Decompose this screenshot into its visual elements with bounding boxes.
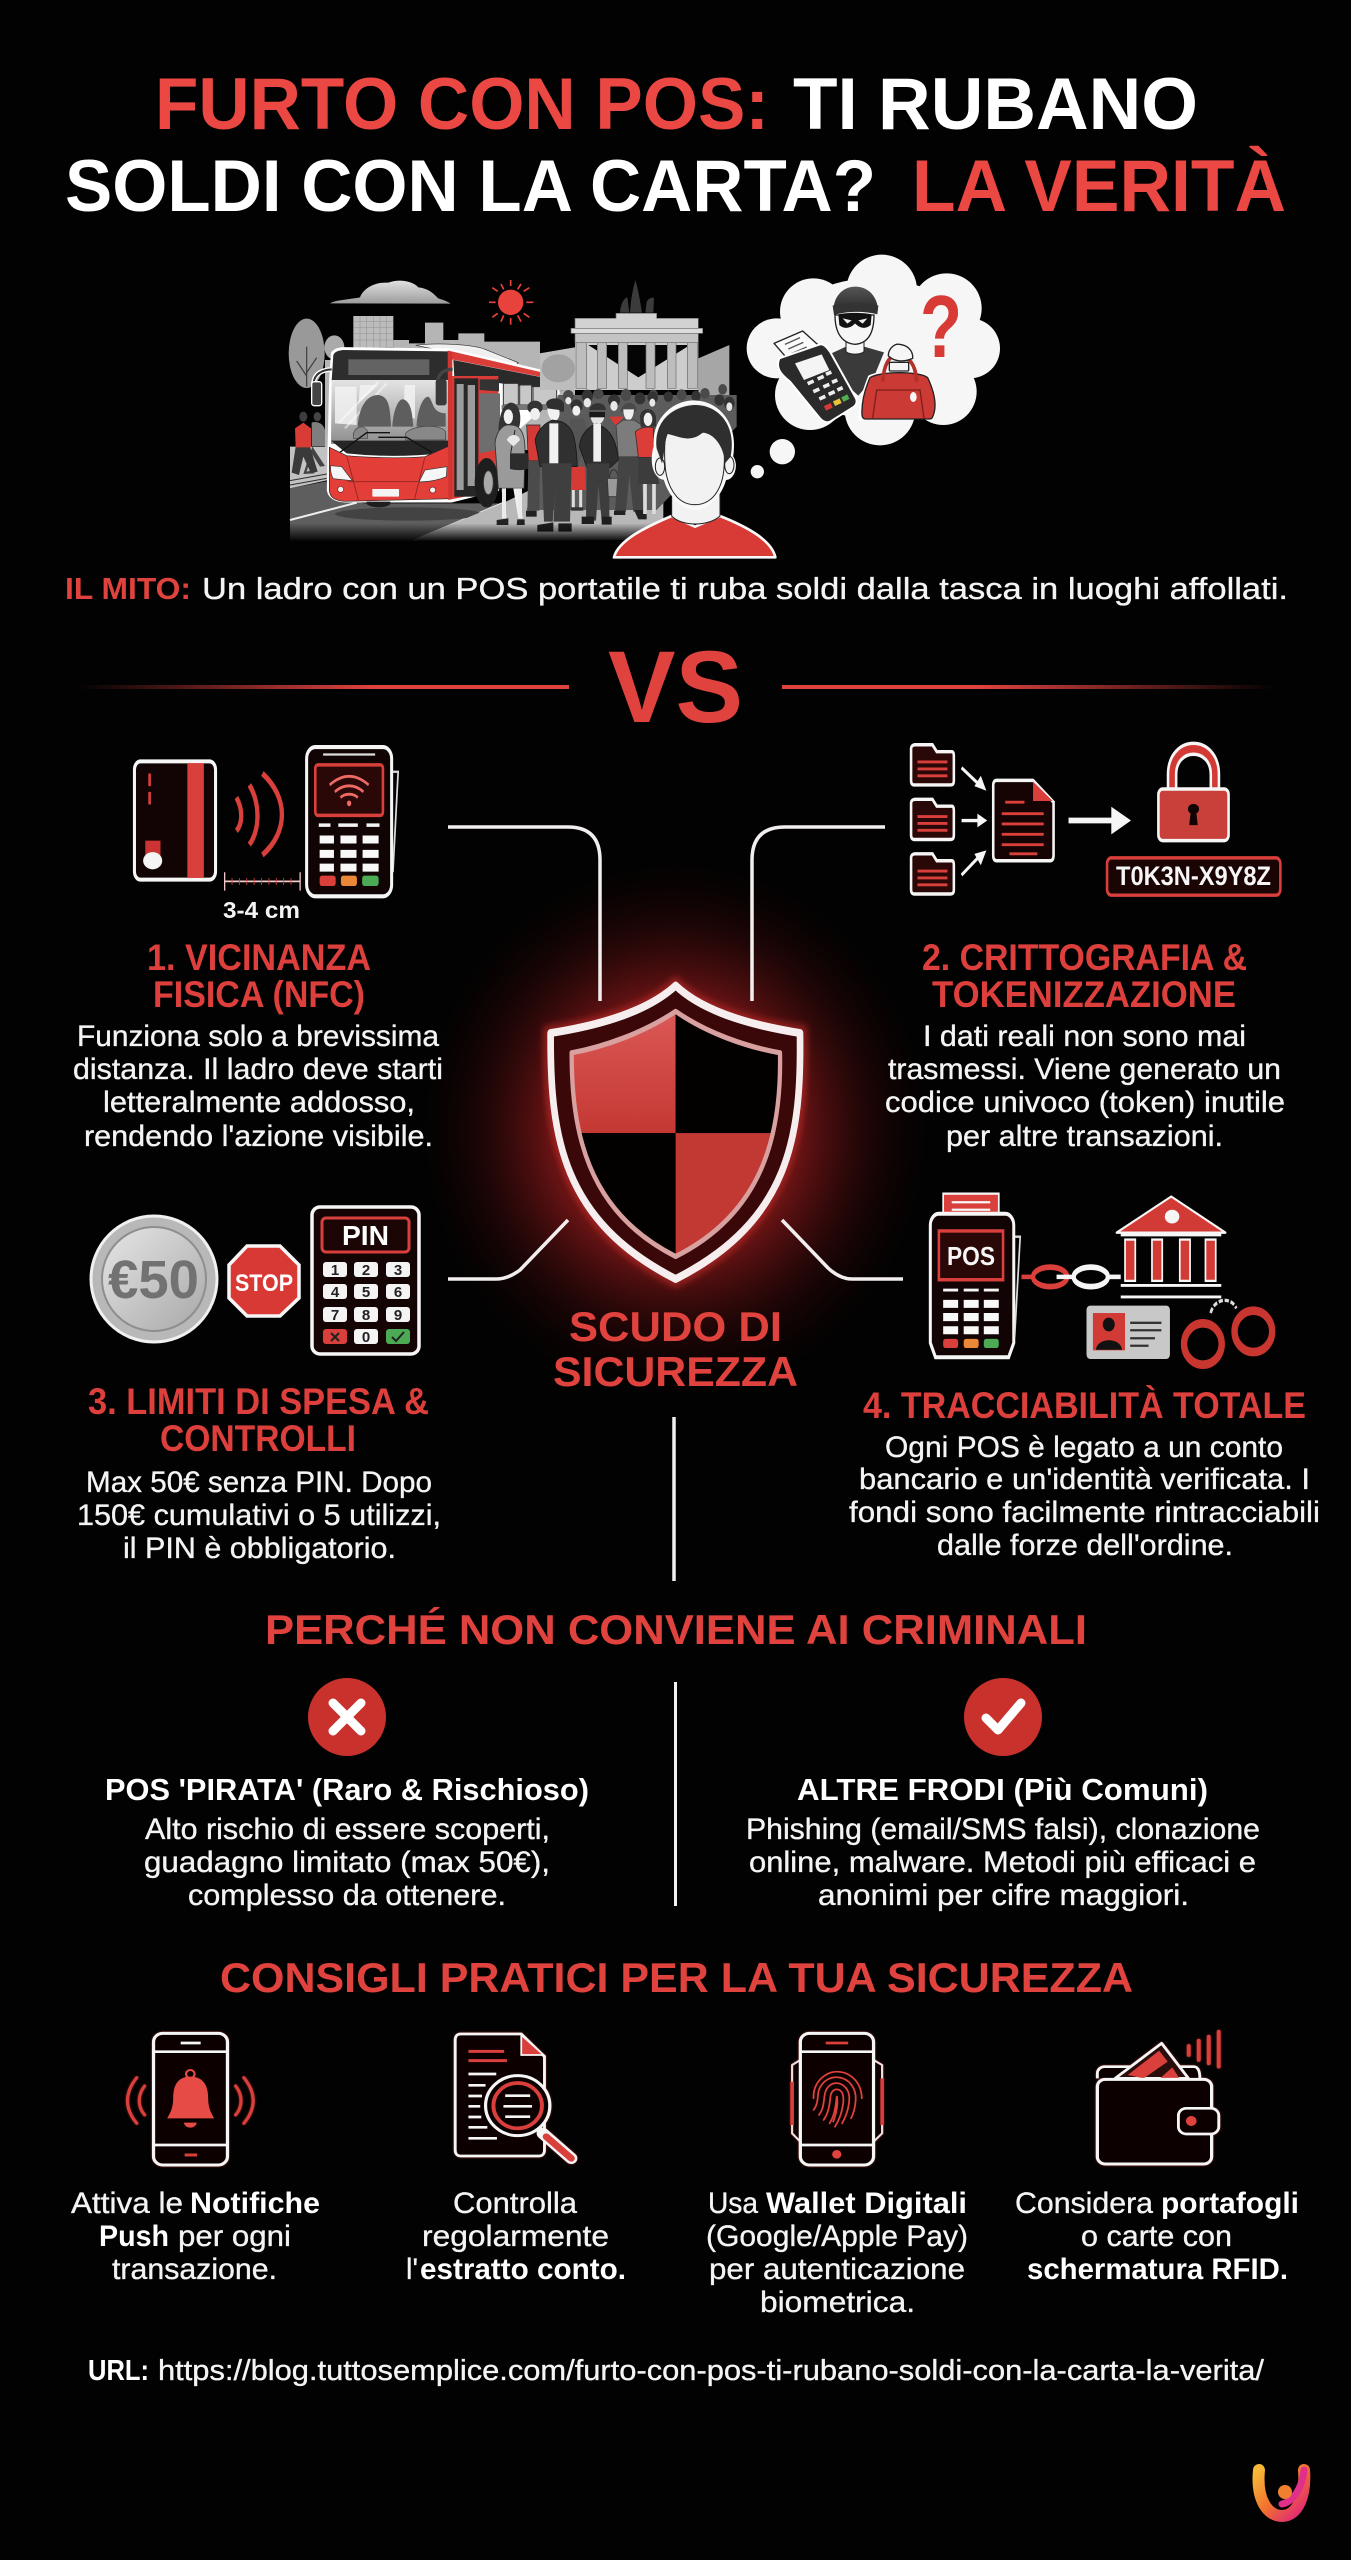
ground (413, 490, 663, 540)
title: TI RUBANO (793, 64, 1198, 145)
crowd (495, 384, 737, 532)
handbag (858, 344, 937, 420)
PIN pad: 4 (331, 1284, 340, 1301)
token code: T0K3N-X9Y8Z (1116, 861, 1271, 891)
thinking man (614, 402, 775, 557)
body text: Phishing (email/SMS falsi), clonazione (746, 1813, 1260, 1846)
tip: RFID shielding (1015, 2032, 1299, 2286)
caption: Controlla (453, 2187, 577, 2220)
woman red shirt (635, 409, 659, 514)
bus (312, 344, 559, 507)
icon: card and POS terminal (134, 747, 398, 896)
road (290, 447, 585, 541)
VS divider: VS (608, 630, 743, 744)
body text: 150€ cumulativi o 5 utilizzi, (77, 1499, 441, 1532)
icon: phone with bell (127, 2033, 253, 2165)
caption: per ogni (178, 2220, 291, 2253)
PIN pad (312, 1207, 419, 1354)
body text: Funziona solo a brevissima (77, 1020, 439, 1053)
panel: pirate POS (105, 1678, 589, 1912)
subheading: POS 'PIRATA' (Raro & Rischioso) (105, 1772, 589, 1807)
body text: Ogni POS è legato a un conto (885, 1431, 1283, 1464)
heading: why criminals avoid it: PERCHÉ NON CONVIENE AI CRIMINALI (265, 1606, 1087, 1653)
cloud (330, 281, 451, 304)
icon: cross (308, 1678, 386, 1756)
PIN pad: 6 (394, 1284, 402, 1301)
caption: biometrica. (760, 2286, 915, 2319)
background trees (540, 345, 729, 395)
man gray shirt (614, 403, 647, 519)
caption: Attiva le (71, 2187, 183, 2220)
PIN pad: 7 (331, 1307, 339, 1324)
body text: trasmessi. Viene generato un (888, 1053, 1281, 1086)
body text: dalle forze dell'ordine. (937, 1529, 1233, 1562)
shield label: SCUDO DI (569, 1303, 782, 1350)
red shirt person (526, 401, 543, 517)
bus scene (289, 280, 585, 541)
body text: Alto rischio di essere scoperti, (145, 1813, 550, 1846)
body text: anonimi per cifre maggiori. (818, 1879, 1189, 1912)
body text: codice univoco (token) inutile (885, 1086, 1285, 1119)
title (65, 64, 1286, 227)
body text: letteralmente addosso, (103, 1086, 415, 1119)
panel: spending limits (77, 1207, 441, 1565)
body text (885, 1020, 1285, 1153)
POS label: POS (947, 1241, 995, 1271)
caption: Push (99, 2220, 169, 2253)
gate, crowd and man (280, 280, 775, 557)
heading: 4. TRACCIABILITÀ TOTALE (863, 1385, 1306, 1426)
shield glow (420, 860, 930, 1400)
body text: online, malware. Metodi più efficaci e (749, 1846, 1256, 1879)
body text (77, 1466, 441, 1565)
caption: per autenticazione (709, 2253, 965, 2286)
PIN pad: 2 (362, 1262, 370, 1279)
man in jacket (535, 398, 577, 532)
PIN pad: 3 (394, 1262, 402, 1279)
title: FURTO CON POS: (155, 64, 769, 145)
heading (147, 937, 371, 1015)
portable POS (774, 331, 857, 422)
fade at bottom (280, 523, 700, 542)
PIN pad: 9 (394, 1307, 402, 1324)
body text (144, 1813, 550, 1912)
security shield (547, 982, 803, 1283)
stop sign (229, 1246, 299, 1316)
red top behind (609, 417, 623, 427)
heading: CONTROLLI (160, 1418, 356, 1459)
caption (1015, 2187, 1299, 2286)
caption: Usa (708, 2187, 758, 2220)
heading: FISICA (NFC) (153, 974, 365, 1015)
thief (829, 287, 884, 396)
panel: traceability (849, 1194, 1320, 1562)
caption: estratto conto. (420, 2253, 626, 2286)
caption (71, 2187, 320, 2286)
icon: POS chained to bank, ID card and handcuffs (930, 1194, 1272, 1365)
heading (88, 1381, 429, 1459)
icon: document and magnifier (455, 2034, 571, 2158)
caption: schermatura RFID. (1027, 2253, 1288, 2286)
tip: push notifications (71, 2033, 320, 2286)
body text: Max 50€ senza PIN. Dopo (86, 1466, 432, 1499)
coin: €50 (108, 1250, 199, 1310)
heading (922, 937, 1247, 1015)
logo (1259, 2470, 1304, 2516)
caption: portafogli (1161, 2187, 1299, 2220)
caption: o carte con (1081, 2220, 1232, 2253)
body text: per altre transazioni. (946, 1120, 1223, 1153)
heading: 2. CRITTOGRAFIA & (922, 937, 1247, 978)
PIN pad: PIN (342, 1220, 389, 1251)
thought bubble (747, 255, 1000, 478)
distance label: 3-4 cm (223, 897, 300, 923)
pedestrians (292, 412, 325, 475)
PIN pad: 5 (362, 1284, 370, 1301)
body text: distanza. Il ladro deve starti (73, 1053, 443, 1086)
body text (73, 1020, 443, 1153)
caption: Wallet Digitali (766, 2187, 967, 2220)
heading: 1. VICINANZA (147, 937, 371, 978)
tip: digital wallets (706, 2033, 968, 2319)
icon: coin, stop sign and PIN pad (91, 1207, 419, 1354)
shield label: SICUREZZA (553, 1348, 798, 1395)
Brandenburg gate (571, 280, 703, 390)
caption (406, 2187, 626, 2286)
body text: il PIN è obbligatorio. (123, 1532, 396, 1565)
subheading: ALTRE FRODI (Più Comuni) (797, 1772, 1208, 1807)
stop sign: STOP (235, 1270, 293, 1297)
myth statement: IL MITO: (65, 571, 191, 606)
heading: 3. LIMITI DI SPESA & (88, 1381, 429, 1422)
illustration: crowded street and thought bubble (280, 255, 1000, 557)
caption: Notifiche (190, 2187, 320, 2220)
tip: check statement (406, 2034, 626, 2286)
connector lines (448, 827, 903, 1581)
PIN pad: 8 (362, 1307, 370, 1324)
icon: documents, lock and token (911, 745, 1280, 895)
body text (849, 1431, 1320, 1562)
sun (489, 280, 533, 325)
PIN pad: 0 (362, 1329, 370, 1346)
woman with bag (495, 403, 529, 525)
question mark: ? (920, 277, 962, 376)
source URL: https://blog.tuttosemplice.com/furto-con-pos-ti-rubano-soldi-con-la-carta-la-verita/ (158, 2355, 1265, 2387)
PIN pad: 1 (331, 1262, 339, 1279)
title: LA VERITÀ (912, 146, 1286, 227)
panel: other frauds (746, 1678, 1260, 1912)
panel: encryption and tokenization (885, 745, 1285, 1153)
myth statement: Un ladro con un POS portatile ti ruba soldi dalla tasca in luoghi affollati. (202, 571, 1288, 606)
masked man (579, 403, 620, 525)
source URL: URL: (88, 2355, 149, 2387)
panel: NFC proximity (73, 747, 443, 1153)
caption (706, 2187, 968, 2319)
icon: check (964, 1678, 1042, 1756)
body text: fondi sono facilmente rintracciabili (849, 1496, 1320, 1529)
coin (91, 1216, 217, 1342)
heading: practical tips: CONSIGLI PRATICI PER LA TUA SICUREZZA (220, 1954, 1133, 2001)
caption: regolarmente (422, 2220, 609, 2253)
body text: I dati reali non sono mai (923, 1020, 1246, 1053)
body text: complesso da ottenere. (188, 1879, 506, 1912)
body text (746, 1813, 1260, 1912)
shield label (553, 1303, 798, 1395)
title: SOLDI CON LA CARTA? (65, 146, 876, 227)
VS divider (78, 630, 1275, 744)
caption: Considera (1015, 2187, 1153, 2220)
body text: rendendo l'azione visibile. (84, 1120, 433, 1153)
icon: wallet with card and signal bars (1097, 2032, 1219, 2164)
icon: phone with fingerprint (792, 2033, 882, 2165)
heading: TOKENIZZAZIONE (932, 974, 1236, 1015)
comparison divider (674, 1682, 677, 1906)
body text: bancario e un'identità verificata. I (859, 1463, 1310, 1496)
caption: transazione. (112, 2253, 277, 2286)
city skyline (289, 316, 575, 450)
caption: l' (406, 2253, 418, 2286)
person behind, red skirt (569, 399, 589, 511)
caption: (Google/Apple Pay) (706, 2220, 968, 2253)
body text: guadagno limitato (max 50€), (144, 1846, 550, 1879)
